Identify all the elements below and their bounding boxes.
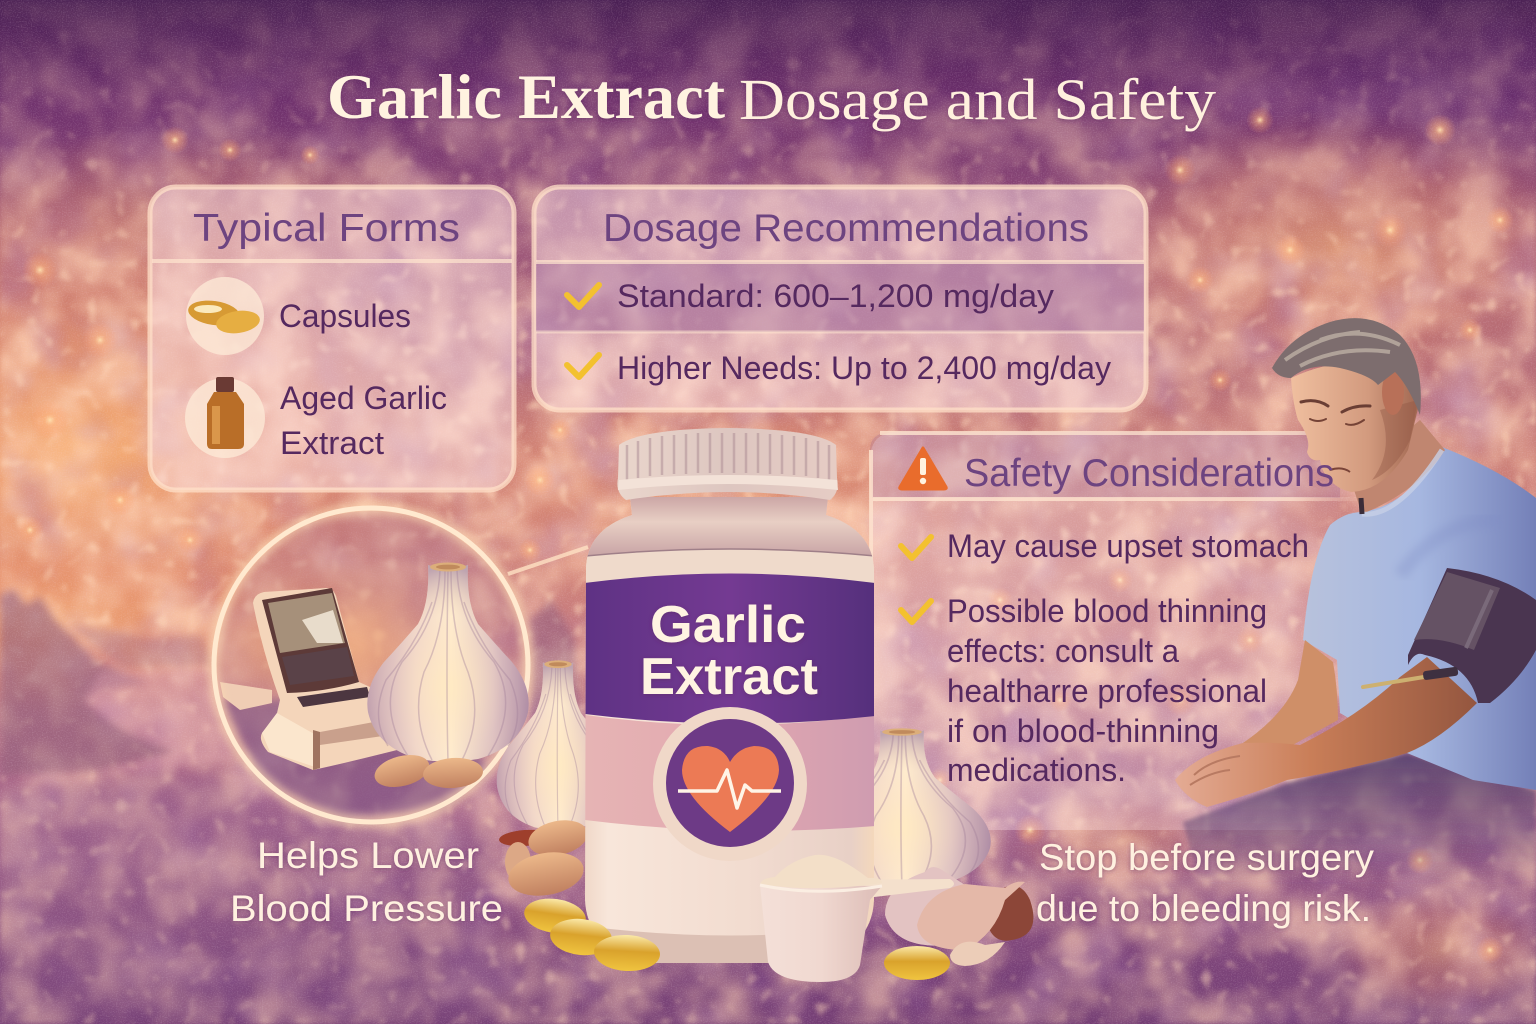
- man with blood pressure cuff: [1175, 318, 1536, 885]
- heading: safety considerations: Safety Considerations: [964, 452, 1334, 495]
- face: [1291, 362, 1420, 492]
- caption: stop before surgery: Stop before surgery: [1039, 837, 1375, 878]
- heading: typical forms: Typical Forms: [193, 207, 460, 250]
- powder scoop: [760, 855, 954, 982]
- label text: [640, 596, 818, 706]
- check icon: [567, 355, 599, 377]
- forearm and hand: [1175, 657, 1477, 807]
- almonds pile: [499, 815, 591, 901]
- safety item: blood thinning: medications.: [947, 752, 1126, 788]
- icon: warning triangle: [900, 448, 946, 489]
- monitor: [253, 588, 397, 770]
- safety item: blood thinning: if on blood-thinning: [947, 713, 1219, 749]
- left arm: [1240, 640, 1338, 752]
- caption: stop before surgery: [1036, 837, 1375, 929]
- background landscape: [0, 590, 580, 1020]
- caption: stop before surgery: due to bleeding risk.: [1036, 888, 1371, 929]
- trousers: [1183, 753, 1536, 885]
- higher dose: Higher Needs: Up to 2,400 mg/day: [617, 350, 1111, 386]
- icon: capsule: [186, 277, 264, 355]
- heart emblem: [653, 707, 807, 861]
- label text: Extract: [640, 648, 818, 706]
- caption: helps lower blood pressure: Blood Pressure: [230, 888, 503, 929]
- caption: helps lower blood pressure: Helps Lower: [257, 835, 479, 876]
- ear: [1382, 369, 1404, 415]
- icon: bottle: [185, 377, 265, 458]
- bottle cap: [617, 428, 838, 500]
- shoulder and neck: [585, 495, 875, 555]
- blood pressure cuff: [1408, 568, 1536, 703]
- title: Garlic Extract: [327, 61, 726, 132]
- shirt: [1303, 447, 1536, 790]
- hair: [1272, 318, 1421, 415]
- collar band: [585, 549, 875, 584]
- bottle: [585, 428, 875, 970]
- neck: [1350, 420, 1445, 514]
- safety item: blood thinning: healtharre professional: [947, 673, 1267, 709]
- almonds: [371, 750, 484, 792]
- standard dose: Standard: 600–1,200 mg/day: [617, 278, 1054, 314]
- connector line: [508, 547, 588, 574]
- stethoscope pen: [1363, 676, 1430, 687]
- check icon: [567, 285, 599, 307]
- panel: typical forms: [150, 187, 514, 490]
- garlic bulb right of bottle: [813, 728, 991, 888]
- title: [327, 61, 1216, 132]
- pink band: [585, 715, 875, 831]
- panel: safety considerations: [869, 431, 1375, 835]
- panel: dosage recommendations: [534, 187, 1146, 410]
- garlic cloves: [885, 867, 1033, 966]
- safety item: blood thinning: Possible blood thinning: [947, 593, 1267, 629]
- pale cuff behind monitor: [220, 682, 272, 710]
- heading: dosage recommendations: Dosage Recommendations: [603, 207, 1089, 250]
- safety item: upset stomach: May cause upset stomach: [947, 528, 1309, 564]
- garlic bulb left of bottle: [497, 660, 619, 830]
- large garlic bulb: [367, 562, 529, 762]
- softgel capsule right: [884, 946, 950, 980]
- safety item: blood thinning: effects: consult a: [947, 633, 1179, 669]
- label text: Garlic: [650, 596, 806, 654]
- label: aged garlic extract: Aged Garlic: [280, 380, 447, 416]
- caption: helps lower blood pressure: [230, 835, 503, 929]
- softgel capsules left: [522, 895, 661, 973]
- check icon: [901, 601, 931, 622]
- title: Dosage and Safety: [739, 67, 1216, 132]
- check icon: [901, 537, 931, 558]
- label: capsules: Capsules: [279, 298, 411, 334]
- circle inset: blood pressure monitor and garlic: [214, 508, 588, 822]
- purple label: [585, 574, 875, 724]
- label: aged garlic extract: Extract: [280, 425, 384, 461]
